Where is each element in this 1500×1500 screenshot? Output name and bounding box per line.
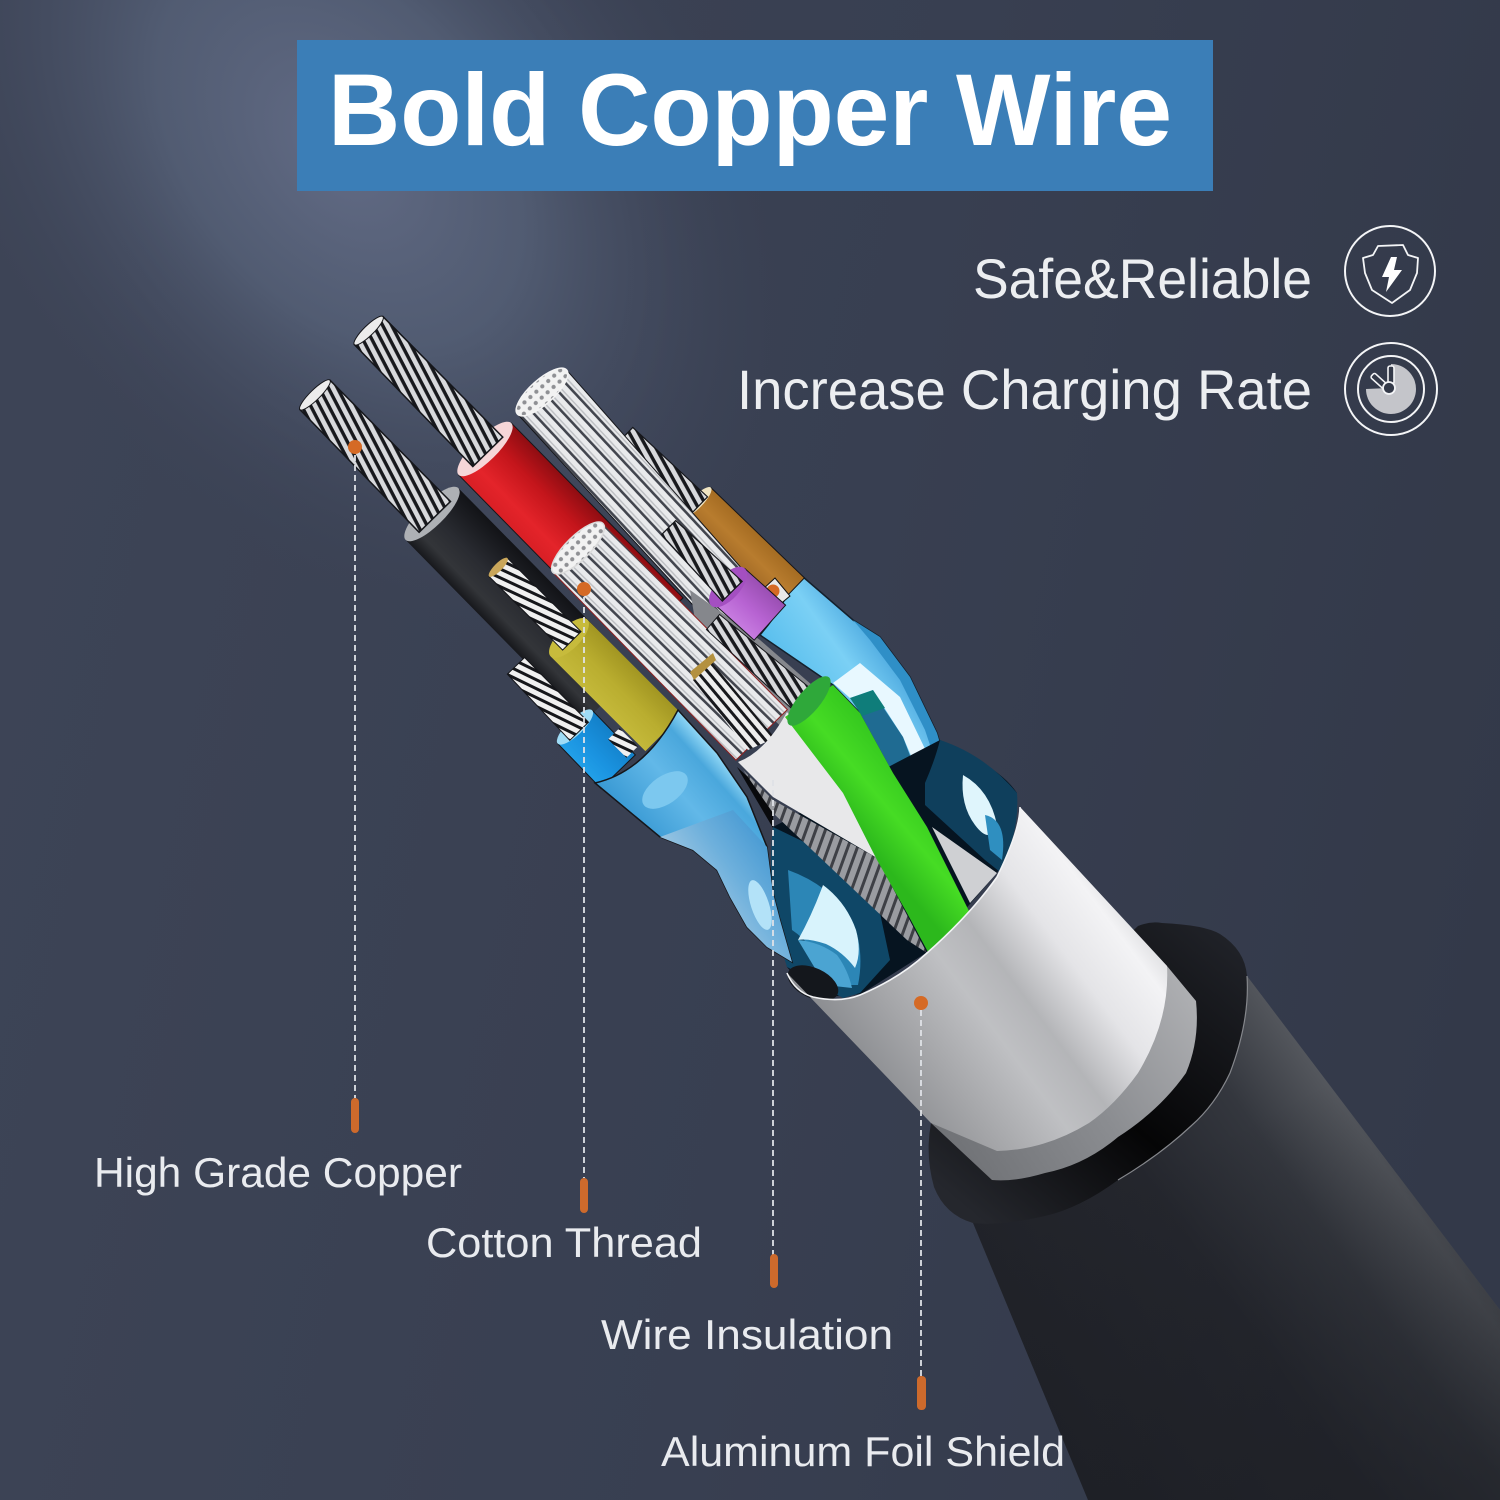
wire: front thin copper strand — [704, 611, 815, 713]
short strand under yellow wire — [608, 728, 638, 758]
cotton-tied strand fan — [690, 653, 775, 750]
icon: charging gauge — [1345, 343, 1437, 435]
title banner: Bold Copper Wire — [328, 53, 1172, 167]
small strand with orange marker — [762, 578, 790, 606]
interior shield cavity — [771, 740, 1017, 1008]
wire: black — [285, 365, 637, 722]
feature: increase charging rate: Increase Charging Rate — [737, 358, 1312, 421]
feature: increase charging rate — [737, 343, 1437, 435]
wire: yellow — [477, 546, 682, 751]
callout: aluminum foil shield: Aluminum Foil Shield — [661, 1428, 1065, 1475]
silver strands behind the front copper — [690, 590, 835, 735]
wire: blue — [499, 649, 635, 788]
cable illustration — [285, 301, 1500, 1500]
rear shielding band — [760, 570, 947, 827]
outer black jacket — [973, 976, 1500, 1500]
wire: large silver front conductor — [544, 514, 787, 760]
callout: wire insulation: Wire Insulation — [601, 1311, 893, 1358]
wire: red — [339, 301, 683, 650]
callout: high grade copper — [94, 440, 462, 1196]
callout: high grade copper: High Grade Copper — [94, 1149, 462, 1196]
foil shield — [787, 807, 1197, 1180]
callout: cotton thread — [426, 582, 702, 1266]
wire: brown — [613, 420, 804, 607]
wire: white insulation — [737, 712, 997, 953]
wire: large silver rear conductor — [509, 361, 767, 637]
wire: green — [781, 670, 970, 952]
icon: shield with lightning bolt — [1345, 226, 1435, 316]
callout: aluminum foil shield — [661, 996, 1065, 1475]
callout: cotton thread: Cotton Thread — [426, 1219, 702, 1266]
feature: safe and reliable — [973, 226, 1435, 316]
callout: wire insulation — [601, 780, 893, 1358]
wire: purple — [648, 512, 786, 642]
front shielding band — [595, 710, 792, 962]
black jacket flange — [929, 922, 1247, 1224]
feature: safe and reliable: Safe&Reliable — [973, 247, 1312, 310]
